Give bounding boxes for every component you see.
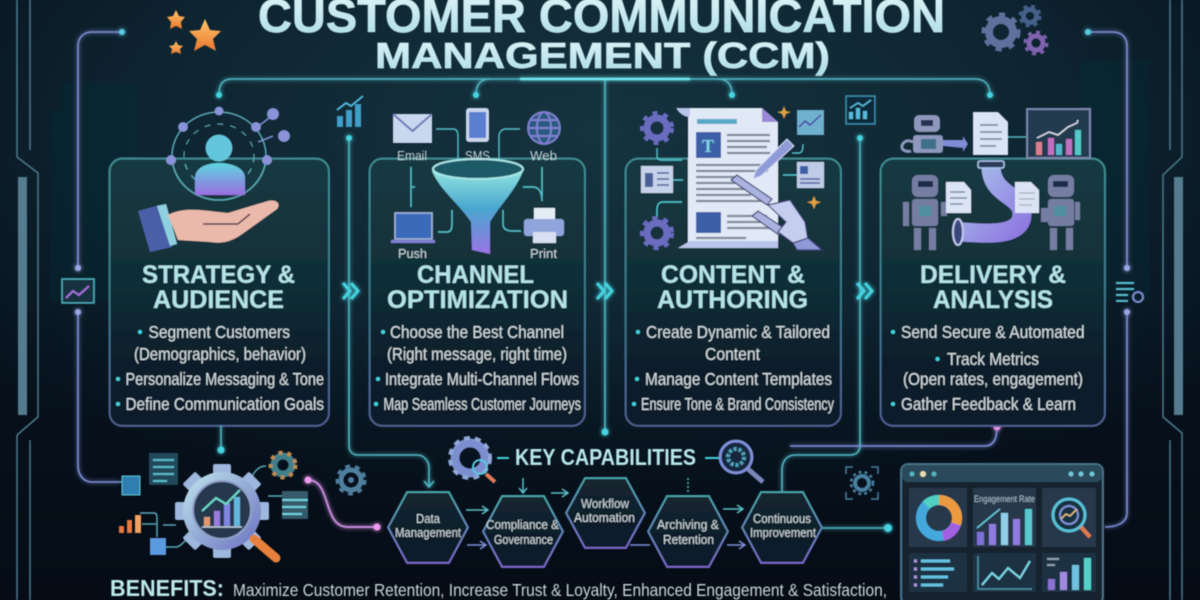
icon: channel funnel: [391, 108, 564, 261]
hexagon: workflow automation: [566, 478, 645, 548]
hexagon: data management: Management: [395, 526, 461, 540]
bullets: (Demographics, behavior): [134, 344, 306, 364]
heading: [387, 261, 568, 314]
connector: top bus: [216, 79, 993, 436]
hexagon: workflow automation: Workflow: [581, 497, 630, 511]
sms: [465, 108, 490, 163]
bullets: Ensure Tone & Brand Consistency: [641, 394, 834, 414]
benefits line: Maximize Customer Retention, Increase Trust & Loyalty, Enhanced Engagement & Satisfaction,: [233, 580, 887, 600]
icon: capabilities magnifier: [705, 441, 763, 482]
sms: SMS: [465, 148, 490, 163]
heading: CHANNEL: [417, 261, 534, 289]
connector: right column: [1085, 29, 1130, 527]
panel: delivery and analysis: [880, 158, 1105, 426]
chevrons between panels: [343, 283, 872, 299]
heading: [142, 261, 295, 314]
side connectors: [657, 144, 803, 218]
hexagon: compliance and governance: [483, 496, 563, 567]
hexagon: workflow automation: Automation: [574, 511, 635, 525]
document: [973, 112, 1008, 155]
push: [391, 213, 435, 261]
pencil: [753, 139, 794, 179]
hexagon: archiving and retention: Archiving &: [657, 518, 720, 532]
bullets: Define Communication Goals: [126, 394, 324, 414]
hexagon: archiving and retention: [648, 496, 728, 567]
icon: scanner gear: [846, 467, 878, 499]
icon: gears top right: [984, 6, 1047, 54]
hexagon: compliance and governance: Compliance &: [486, 518, 560, 532]
heading: [657, 261, 808, 314]
bullets: Segment Customers: [148, 322, 290, 342]
right robot: [1041, 175, 1080, 250]
connector: column to data management: [346, 135, 434, 487]
icon: colored small gear: [270, 452, 296, 478]
print: Print: [530, 246, 557, 261]
print: [524, 208, 564, 261]
icon: capabilities gear: [450, 438, 509, 482]
icon: list search right: [1116, 283, 1143, 302]
title: [258, 0, 945, 76]
heading: OPTIMIZATION: [387, 286, 568, 314]
bullets: Gather Feedback & Learn: [901, 394, 1076, 414]
right frame lines: [1163, 0, 1183, 600]
hexagon: continuous improvement: Improvement: [750, 526, 816, 540]
bullets: Send Secure & Automated: [901, 322, 1084, 342]
side gears and cards: [642, 113, 672, 248]
hexagon flow arrows: [466, 478, 745, 549]
icon: growth chart column 4: [846, 96, 875, 124]
hexagon: continuous improvement: Continuous: [753, 512, 811, 526]
bullets: [374, 322, 581, 414]
small icons around hub: [149, 453, 178, 485]
heading: ANALYSIS: [933, 286, 1053, 314]
bullets: Personalize Messaging & Tone: [126, 369, 324, 389]
connector: column to continuous improvement: [782, 135, 1000, 532]
left frame lines: [17, 0, 38, 600]
email: Email: [397, 148, 427, 163]
heading: key capabilities: KEY CAPABILITIES: [515, 444, 696, 470]
hexagon: compliance and governance: Governance: [494, 533, 553, 547]
icon: person in orbit with hand: [138, 106, 290, 252]
chart window: [1027, 109, 1090, 158]
heading: STRATEGY &: [142, 261, 295, 289]
bullets: Content: [705, 344, 760, 364]
faint building silhouettes: [50, 60, 1150, 302]
document: [688, 108, 778, 248]
bullets: Create Dynamic & Tailored: [646, 322, 830, 342]
icon: monitor left: [62, 279, 94, 303]
gear teeth: [175, 464, 269, 558]
bullets: Track Metrics: [947, 349, 1039, 369]
hexagon: continuous improvement: [742, 492, 822, 563]
heading: AUDIENCE: [153, 286, 284, 314]
card: bars: [1042, 553, 1096, 592]
connector: left column: [75, 29, 125, 482]
card: list: [909, 553, 967, 592]
card: magnifier gauge: [1042, 488, 1096, 547]
bullets: Choose the Best Channel: [390, 322, 564, 342]
icon: analytics gear hub: [119, 453, 308, 558]
bullets: Map Seamless Customer Journeys: [384, 394, 581, 414]
web: Web: [530, 148, 557, 163]
panel: strategy and audience: [110, 158, 329, 426]
icon: stars: [167, 10, 221, 54]
bullets: (Open rates, engagement): [903, 369, 1083, 389]
icon: document with robot hand: T: [702, 136, 714, 156]
bullets: (Right message, right time): [387, 344, 567, 364]
icon: robots and pipeline: [902, 109, 1090, 250]
connector: strategy to gear: [218, 426, 224, 454]
bullets: Integrate Multi-Channel Flows: [385, 369, 579, 389]
funnel body: [432, 171, 523, 254]
benefits line: [110, 575, 887, 600]
hexagon: archiving and retention: Retention: [663, 533, 714, 547]
card: line chart: [973, 553, 1036, 592]
icon: shield gear: [337, 466, 365, 494]
hexagon: data management: Data: [416, 512, 440, 526]
icon: document with robot hand: [641, 106, 824, 250]
web: [528, 112, 560, 163]
pipe: [962, 166, 1022, 233]
hexagon: data management: [388, 492, 468, 563]
heading: AUTHORING: [657, 286, 808, 314]
card: engagement rate: [973, 488, 1036, 547]
heading: CONTENT &: [661, 261, 805, 289]
left robot: [903, 175, 947, 250]
bullets: [891, 322, 1084, 414]
connector: magenta curve: [304, 476, 380, 530]
top robot with arrow: [902, 115, 968, 153]
panel: content and authoring: [626, 158, 841, 426]
icon: growth chart column 2: [337, 96, 363, 127]
heading: DELIVERY &: [920, 261, 1066, 289]
email: [393, 114, 432, 163]
panel: channel optimization: [370, 158, 585, 426]
channel connectors: [411, 129, 542, 232]
panel: dashboard: [901, 464, 1103, 600]
card: engagement rate: Engagement Rate: [974, 494, 1035, 504]
bullets: Manage Content Templates: [645, 369, 832, 389]
bullets: [632, 322, 834, 414]
push: Push: [398, 246, 427, 261]
title: MANAGEMENT (CCM): [375, 35, 830, 76]
bullets: [116, 322, 324, 414]
window bar: [902, 465, 1102, 482]
heading: [920, 261, 1066, 314]
card: donut: [909, 488, 967, 547]
robot hand: [731, 175, 822, 250]
